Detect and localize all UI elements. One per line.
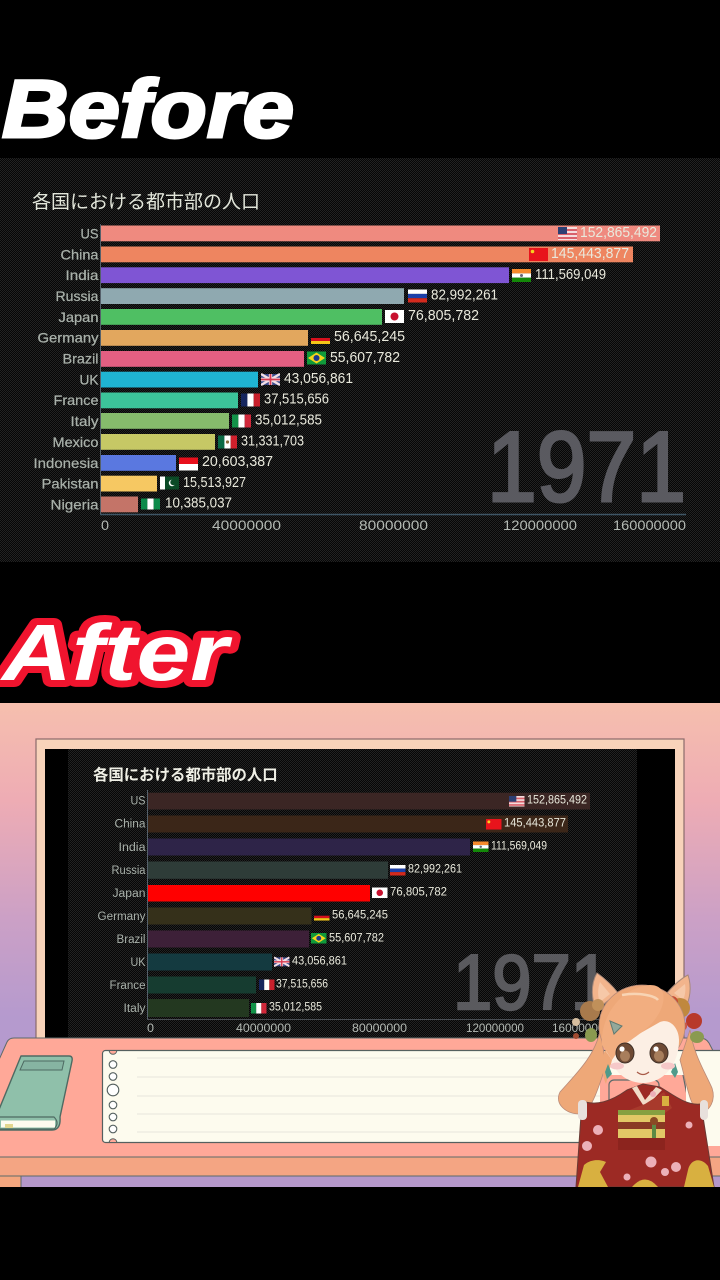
row: France	[54, 392, 329, 408]
row: Russia: Russia	[56, 288, 99, 304]
row: Russia	[56, 288, 498, 304]
row: India	[118, 838, 547, 856]
row: India: 111,569,049	[491, 838, 547, 852]
notebook paper	[102, 1050, 720, 1142]
row: India: India	[118, 842, 146, 854]
desk	[0, 1038, 720, 1188]
ears	[592, 972, 691, 1004]
row: Indonesia	[34, 454, 273, 471]
row: Brazil: Brazil	[62, 350, 98, 366]
row: China: China	[60, 246, 99, 262]
axis: 160000000	[613, 518, 686, 533]
face	[610, 1043, 675, 1074]
row: India	[66, 267, 606, 283]
row: Pakistan	[42, 475, 246, 492]
hair ornaments	[572, 996, 704, 1043]
row: Japan (highlighted): 76,805,782	[390, 884, 447, 898]
row: Brazil: 55,607,782	[329, 930, 384, 944]
axis	[147, 790, 611, 1035]
axis: 0	[147, 1023, 154, 1035]
row: UK: 43,056,861	[292, 954, 347, 968]
row: Brazil	[116, 930, 384, 948]
row: China	[114, 816, 568, 832]
axis: 80000000	[359, 518, 428, 533]
row: Germany: 56,645,245	[332, 908, 388, 922]
row: US: 152,865,492	[580, 225, 657, 241]
row: Italy	[124, 999, 322, 1017]
row: France: France	[110, 980, 146, 992]
monitor frame	[36, 739, 684, 1049]
row: China	[60, 246, 633, 262]
row: India: India	[66, 267, 99, 283]
row: Russia: 82,992,261	[431, 288, 498, 304]
row: China: 145,443,877	[504, 816, 566, 830]
row: Mexico: Mexico	[52, 434, 99, 450]
row: India: 111,569,049	[535, 267, 606, 283]
row: Germany	[98, 908, 388, 924]
row: Nigeria	[50, 496, 232, 512]
row: US: 152,865,492	[527, 792, 587, 806]
row: US: US	[80, 226, 98, 242]
row: US	[130, 792, 590, 810]
twin tails	[558, 1030, 713, 1114]
row: UK	[80, 371, 353, 388]
character: girl in kimono	[558, 973, 720, 1187]
row: Russia	[112, 862, 462, 879]
row: UK: UK	[80, 372, 99, 388]
row: Italy: Italy	[124, 1003, 146, 1015]
axis: 80000000	[352, 1023, 407, 1035]
heading: After: After	[0, 608, 233, 697]
row: Indonesia: Indonesia	[34, 455, 99, 471]
icon: green book	[0, 1056, 72, 1130]
axis: 160000000	[552, 1023, 611, 1035]
kimono	[576, 1084, 714, 1187]
row: Italy: 35,012,585	[255, 412, 322, 428]
row: UK: 43,056,861	[284, 371, 353, 387]
row: Germany: Germany	[98, 911, 146, 923]
row: Germany: Germany	[38, 330, 98, 346]
axis: 40000000	[236, 1023, 291, 1035]
row: Italy: Italy	[70, 413, 98, 429]
axis: 40000000	[212, 518, 281, 533]
axis	[100, 224, 686, 533]
panel: before chart	[0, 158, 720, 562]
row: Nigeria: 10,385,037	[165, 496, 232, 512]
row: Italy	[70, 412, 322, 429]
row: Germany	[38, 329, 405, 346]
axis: 120000000	[466, 1023, 524, 1035]
row: France: 37,515,656	[276, 976, 328, 990]
axis: 120000000	[503, 518, 577, 533]
row: France: France	[54, 392, 99, 408]
row: France: 37,515,656	[264, 392, 329, 408]
row: Japan (highlighted): Japan	[112, 888, 146, 900]
row: UK	[130, 954, 347, 970]
row: Japan (highlighted)	[112, 884, 447, 902]
year watermark: 1971	[487, 411, 686, 522]
desk items behind character	[600, 1075, 720, 1146]
row: Brazil	[62, 350, 400, 367]
row: Nigeria: Nigeria	[50, 496, 99, 512]
row: Germany: 56,645,245	[334, 329, 405, 345]
row: UK: UK	[130, 957, 146, 969]
row: Pakistan: Pakistan	[42, 476, 98, 492]
row: China: 145,443,877	[551, 246, 629, 262]
earrings	[605, 1063, 678, 1079]
row: Brazil: 55,607,782	[330, 350, 400, 366]
row: Indonesia: 20,603,387	[202, 454, 273, 470]
row: Pakistan: 15,513,927	[183, 475, 246, 491]
heading: Before: Before	[2, 64, 294, 155]
row: Brazil: Brazil	[116, 934, 146, 946]
axis: 0	[101, 518, 109, 533]
row: Italy: 35,012,585	[269, 1000, 322, 1014]
row: Japan	[58, 308, 479, 325]
row: US: US	[130, 796, 146, 808]
chart title: 各国における都市部の人口	[93, 765, 278, 784]
row: Japan: 76,805,782	[408, 308, 479, 324]
row: Mexico: 31,331,703	[241, 434, 304, 450]
row: Japan: Japan	[58, 309, 98, 325]
row: France	[110, 976, 328, 994]
head	[599, 985, 685, 1084]
hair clip	[610, 1021, 622, 1034]
row: Mexico	[52, 434, 304, 450]
panel: after scene	[0, 703, 720, 1188]
year watermark: 1971	[453, 938, 610, 1026]
row: US	[80, 225, 660, 242]
row: China: China	[114, 818, 146, 830]
row: Russia: 82,992,261	[408, 862, 462, 876]
row: Russia: Russia	[112, 865, 146, 877]
chart title: 各国における都市部の人口	[32, 191, 260, 213]
